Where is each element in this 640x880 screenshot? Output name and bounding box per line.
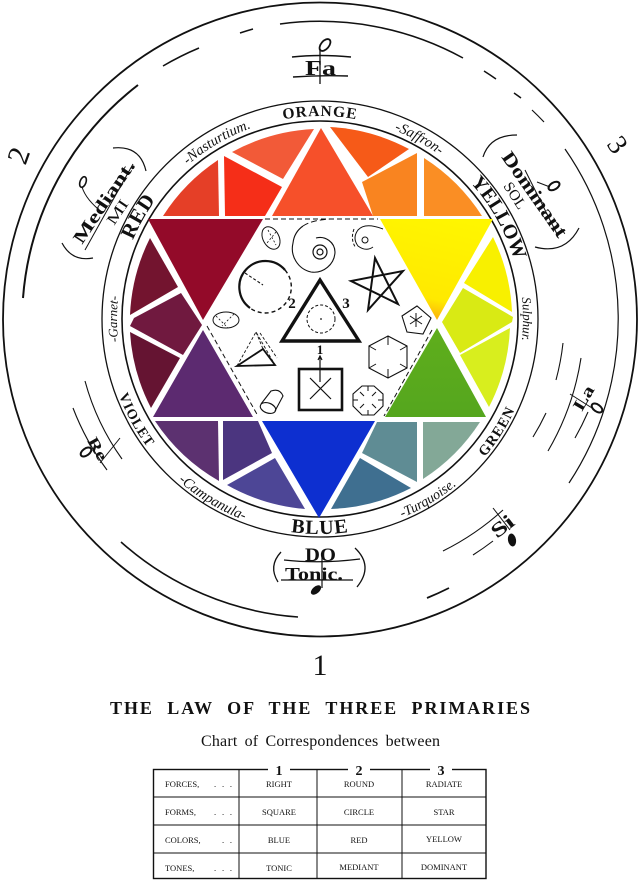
ring labels: Sulphur. bbox=[520, 298, 532, 340]
column 2 values: RED bbox=[350, 835, 368, 845]
row headings: . . bbox=[222, 835, 232, 845]
note: Dominant SOL: SOL bbox=[500, 179, 529, 213]
note: Re bbox=[73, 381, 122, 470]
note: Do Tonic: DO bbox=[305, 545, 336, 566]
star bbox=[351, 258, 403, 310]
ring labels: VIOLET bbox=[120, 392, 155, 446]
note: Si: Si bbox=[487, 510, 519, 543]
column numbers: 2 bbox=[356, 764, 362, 779]
scale numbers: 2 bbox=[1, 143, 37, 168]
round force circle bbox=[239, 261, 291, 313]
pyramid bbox=[237, 332, 277, 366]
primary and secondary triangles bbox=[148, 128, 493, 518]
ovals bbox=[213, 312, 239, 328]
hexagon bbox=[369, 336, 407, 378]
scale numbers bbox=[1, 131, 634, 682]
ring labels: -Turquoise. bbox=[401, 482, 456, 516]
scale numbers: 3 bbox=[600, 131, 634, 160]
note: Dominant SOL: Dominant bbox=[497, 148, 572, 242]
table grid bbox=[153, 764, 486, 878]
note: La bbox=[533, 343, 604, 451]
column 2 values: MEDIANT bbox=[339, 862, 379, 872]
ring labels bbox=[108, 106, 532, 534]
column 3 values: DOMINANT bbox=[421, 862, 468, 872]
ring labels: -Garnet- bbox=[108, 296, 118, 342]
ring labels: -Saffron- bbox=[396, 124, 442, 152]
column 1 values: SQUARE bbox=[262, 807, 296, 817]
triangle numbers bbox=[288, 296, 350, 357]
ring labels: BLUE bbox=[291, 519, 347, 534]
column numbers bbox=[276, 764, 444, 779]
square bbox=[299, 356, 342, 410]
row headings: . . . bbox=[214, 807, 232, 817]
note: Mediant MI: Mediant. bbox=[69, 156, 139, 247]
central diagrams bbox=[213, 219, 431, 415]
scale numbers: 1 bbox=[312, 649, 328, 682]
row headings: FORMS, bbox=[165, 807, 196, 817]
ring labels: YELLOW bbox=[472, 174, 527, 256]
triangle numbers: 3 bbox=[342, 296, 350, 312]
ring labels: RED bbox=[120, 195, 153, 240]
note: Fa bbox=[292, 37, 351, 84]
note: Re: Re bbox=[84, 434, 110, 464]
column 2 values: ROUND bbox=[344, 779, 374, 789]
label ring bbox=[102, 101, 538, 537]
note: Do Tonic bbox=[274, 545, 365, 597]
column numbers: 3 bbox=[438, 764, 444, 779]
note: Mediant MI: MI bbox=[104, 197, 132, 228]
row headings: TONES, bbox=[165, 863, 194, 873]
circle inside triangle bbox=[307, 305, 335, 333]
note: Si bbox=[443, 508, 519, 555]
column 3 values: RADIATE bbox=[426, 779, 462, 789]
small spiral bbox=[352, 226, 383, 249]
note: Dominant SOL bbox=[483, 135, 579, 249]
cylinder bbox=[259, 390, 283, 415]
pentagon bbox=[402, 306, 431, 334]
row headings: COLORS, bbox=[165, 835, 201, 845]
central hexagon boundary bbox=[207, 219, 432, 416]
column 3 values bbox=[421, 779, 468, 872]
column 3 values: YELLOW bbox=[426, 834, 462, 844]
row headings: FORCES, bbox=[165, 779, 199, 789]
ring labels: -Nasturtium. bbox=[186, 124, 250, 162]
outer circle and dashed scale rings bbox=[3, 2, 637, 636]
ring labels: ORANGE bbox=[283, 106, 356, 119]
spiral bbox=[292, 219, 335, 272]
main triangle bbox=[282, 280, 359, 341]
correspondence table bbox=[153, 764, 486, 878]
tints around the star bbox=[130, 127, 513, 509]
column 3 values: STAR bbox=[433, 807, 455, 817]
triangle numbers: 2 bbox=[288, 296, 296, 312]
ring labels: GREEN bbox=[480, 406, 514, 455]
row headings bbox=[165, 779, 232, 873]
column 1 values: RIGHT bbox=[266, 779, 293, 789]
column 2 values: CIRCLE bbox=[344, 807, 374, 817]
row headings: . . . bbox=[214, 779, 232, 789]
ring labels: -Campanula- bbox=[180, 478, 245, 518]
triangle numbers: 1 bbox=[317, 342, 323, 357]
note: La: La bbox=[569, 381, 599, 414]
colour star bbox=[130, 127, 513, 518]
column 1 values: TONIC bbox=[266, 863, 292, 873]
title: THE LAW OF THE THREE PRIMARIES bbox=[110, 698, 530, 718]
note: Do Tonic: Tonic. bbox=[285, 564, 343, 584]
column numbers: 1 bbox=[276, 764, 282, 779]
subtitle: Chart of Correspondences between bbox=[201, 733, 440, 750]
note: Fa: Fa bbox=[305, 56, 337, 80]
column 1 values bbox=[262, 779, 296, 873]
note: Mediant MI bbox=[62, 148, 146, 259]
row headings: . . . bbox=[214, 863, 232, 873]
column 2 values bbox=[339, 779, 379, 872]
octagon bbox=[353, 386, 383, 415]
column 1 values: BLUE bbox=[268, 835, 290, 845]
